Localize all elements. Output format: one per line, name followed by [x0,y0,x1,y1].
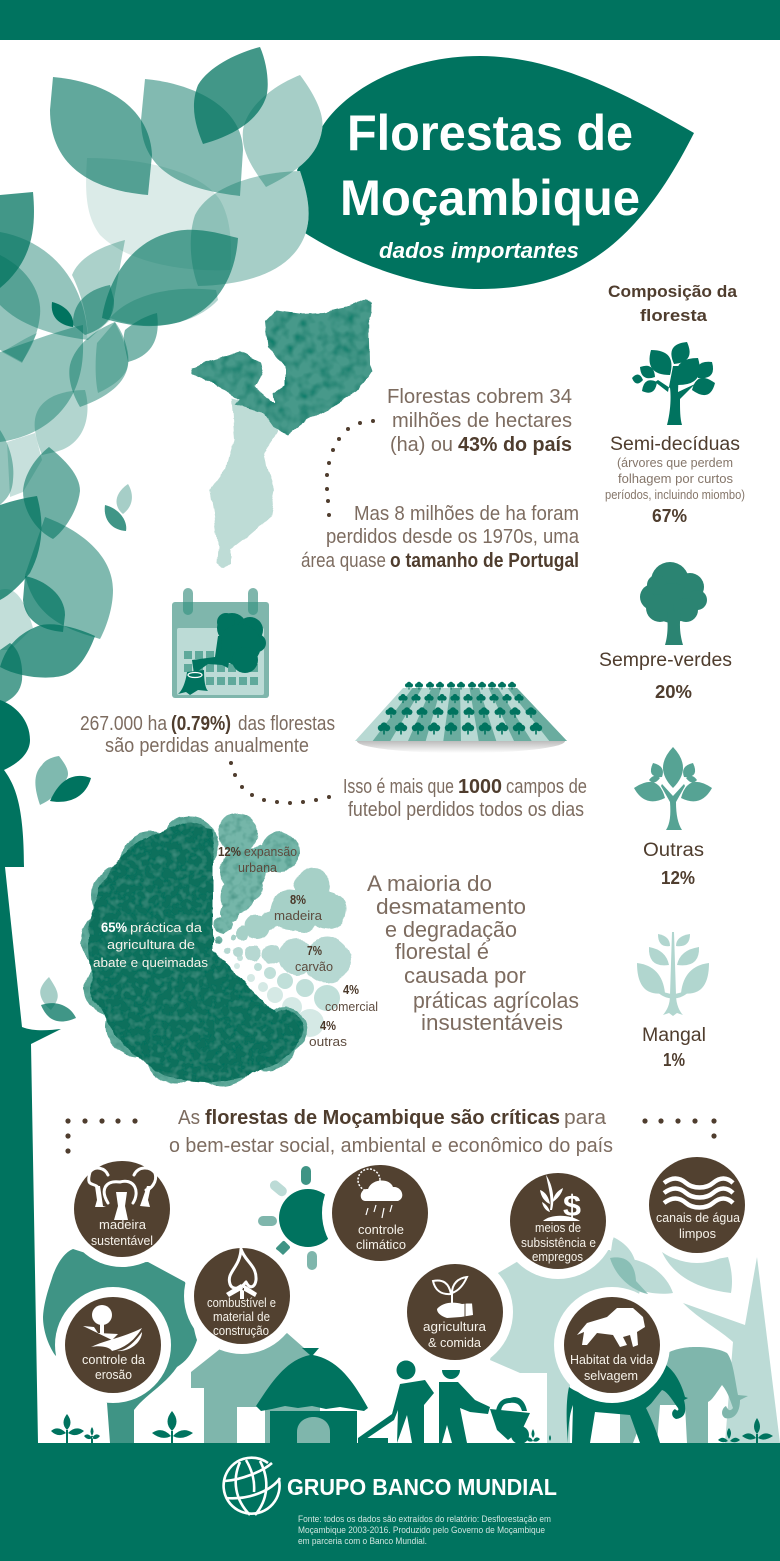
worker with shovel [396,1360,416,1380]
logo: World Bank Group: GRUPO BANCO MUNDIAL [287,1474,557,1500]
benefit: clean waterways [649,1157,745,1253]
source note: Moçambique 2003-2016. Produzido pelo Governo de Moçambique [298,1525,545,1535]
pie label: slash and burn: agricultura de [107,937,195,952]
benefit: fuel and building material: construção [213,1323,269,1338]
scene: hut [256,1348,368,1443]
scene: dark elephant [567,1363,688,1443]
icon: campfire [226,1249,257,1299]
deforestation cause text: práticas agrícolas [413,988,579,1013]
pie label: commercial: 4% [343,982,359,997]
pie label: charcoal [295,943,333,974]
deforestation cause text: insustentáveis [421,1010,563,1035]
benefit: sustainable timber: madeira [99,1217,147,1232]
scene: light elephant [620,1347,748,1443]
pitch [355,688,567,741]
title leaf [297,56,694,289]
icon: plant and dollar: $ [563,1190,581,1223]
benefit: sustainable timber [74,1161,170,1257]
icon: three trees [89,1168,156,1220]
mangrove label: Mangal [642,1025,706,1046]
tree-shaped pie chart [81,813,378,1087]
forest loss text [301,503,580,572]
benefit: agriculture and food: agricultura [423,1319,487,1334]
semi-deciduous label: (árvores que perdem [617,456,733,470]
forest cover text: (ha) ou [390,434,453,456]
tree canopy: upper leaves [50,47,323,326]
composition heading: Composição da [608,282,738,301]
scene: plants [51,1411,773,1443]
icon: evergreen tree [640,562,707,645]
benefit: climate control: climático [356,1237,406,1252]
benefit: climate control [332,1165,428,1261]
benefit: livelihoods and jobs [510,1173,606,1269]
benefit: agriculture and food: & comida [428,1335,482,1350]
other trees label: 12% [661,867,695,888]
dotted accents [65,1118,717,1154]
source note: em parceria com o Banco Mundial. [298,1536,427,1546]
pie label: other: 4% [320,1018,336,1033]
benefit: climate control: controle [358,1222,404,1237]
map: north, forested [192,298,372,435]
felled tree [178,613,266,695]
forest cover text: milhões de hectares [392,410,572,432]
tree canopy: left leaves [0,192,158,705]
football fields text [343,776,587,821]
forest loss text: área quase [301,550,386,572]
map of Mozambique [192,298,372,568]
icon: globe [224,1458,280,1515]
worker with wheelbarrow [442,1370,460,1379]
pie label: urban: urbana [238,860,278,875]
evergreen label: Sempre-verdes [599,650,732,671]
other trees label: Outras [643,840,704,861]
icon: lion [577,1308,645,1347]
scene: sun [258,1166,337,1270]
deforestation cause text: e degradação [385,917,517,942]
floating leaves [35,484,132,1022]
semi-deciduous label: Semi-decíduas [610,434,740,455]
pie label: urban: 12% [218,844,241,859]
section heading: As [178,1107,200,1129]
map: south, lighter [210,398,278,568]
composition heading: floresta [640,306,708,325]
pitch trees [378,682,542,734]
football fields text: 1000 [458,776,502,798]
slice: timber [230,867,346,941]
benefit: sustainable timber: sustentável [91,1233,153,1248]
evergreen label [599,650,732,702]
benefit: erosion control: controle da [82,1352,146,1367]
icon: tree and field [83,1305,142,1351]
scene: workers [358,1360,530,1444]
slice: charcoal [225,937,350,983]
deforestation cause text: A maioria do [367,871,492,896]
football pitch with trees [355,682,567,753]
pie label: slash and burn: 65% [101,920,127,935]
section heading: para [564,1107,607,1129]
section heading: o bem-estar social, ambiental e econômico do país [169,1135,613,1157]
pie label: slash and burn [93,920,209,970]
pie label: urban [218,844,297,875]
semi-deciduous label [605,434,745,526]
benefit: clean waterways: canais de água [656,1210,741,1225]
top banner [0,0,780,40]
pie label: urban: expansão [244,844,297,859]
icon: water waves [664,1178,733,1208]
tree trunk [0,700,61,1443]
section heading [169,1107,613,1157]
pie label: slash and burn: abate e queimadas [93,955,209,970]
title text: dados importantes [379,238,579,263]
icon: calendar with felled tree [172,588,269,698]
forest cover text [387,386,572,456]
other trees label [643,840,704,888]
benefit: fuel and building material: material de [213,1309,270,1324]
pie label: charcoal: carvão [295,959,333,974]
dotted connector: loss [229,761,331,805]
football fields text: Isso é mais que [343,776,454,798]
forest loss text: o tamanho de Portugal [390,550,579,572]
calendar body [172,602,269,698]
benefit: livelihoods and jobs: empregos [532,1249,583,1264]
icon: cloud and rain [358,1169,402,1218]
benefit: fuel and building material [194,1248,290,1344]
slice: commercial [237,955,340,1011]
semi-deciduous label: folhagem por curtos [618,472,733,486]
logo: World Bank Group [224,1458,557,1515]
title text: Florestas de [347,105,633,161]
mangrove label: 1% [663,1049,685,1070]
benefit: erosion control [65,1297,161,1393]
footer band [0,1443,780,1561]
scene: house [191,1333,320,1443]
composition heading [608,282,738,325]
football fields text: futebol perdidos todos os dias [348,799,584,821]
dotted connector: map [325,419,375,517]
pie label: timber [274,892,323,923]
icon: other trees [634,747,712,830]
loss per year text [80,713,335,757]
pitch shadow [357,729,565,753]
scene: pale tree [490,1237,780,1443]
icon: seedling in hand [433,1277,474,1318]
forest cover text: Florestas cobrem 34 [387,386,572,408]
benefit: erosion control: erosão [95,1367,132,1382]
pie label: other: outras [309,1034,348,1049]
title text [340,105,640,263]
slice: urban expansion [214,813,300,944]
pie label: timber: 8% [290,892,306,907]
deforestation cause text: florestal é [395,939,489,964]
benefit: agriculture and food [407,1264,503,1360]
benefit: clean waterways: limpos [679,1226,716,1241]
slice: other [234,963,324,1037]
source note: Fonte: todos os dados são extraídos do relatório: Desflorestação em [298,1514,551,1524]
forest loss text: Mas 8 milhões de ha foram [354,503,579,525]
forest loss text: perdidos desde os 1970s, uma [326,526,580,548]
pie label: other [309,1018,348,1049]
mangrove label [642,1025,706,1070]
deforestation cause text [367,871,579,1035]
football fields text: campos de [506,776,587,798]
deforestation cause text: desmatamento [376,894,526,919]
pie label: charcoal: 7% [307,943,322,958]
loss per year text: (0.79%) [171,713,231,735]
slice: slash and burn [81,816,307,1087]
loss per year text: são perdidas anualmente [105,735,309,757]
scene: left tree [43,1249,197,1443]
semi-deciduous label: períodos, incluindo miombo) [605,488,745,502]
icon: mangrove [637,932,709,1016]
pie label: commercial: comercial [325,999,378,1014]
icon: semi-deciduous tree [632,342,715,425]
title text: Moçambique [340,170,640,226]
benefit: wildlife habitat [564,1297,660,1393]
section heading: florestas de Moçambique são críticas [205,1107,560,1129]
wheelbarrow [490,1409,530,1440]
benefit: livelihoods and jobs: subsistência e [521,1235,596,1250]
benefit: livelihoods and jobs: meios de [535,1220,581,1235]
benefit: wildlife habitat: Habitat da vida [570,1352,654,1367]
forest cover text: 43% do país [458,434,572,456]
pie label: timber: madeira [274,908,323,923]
semi-deciduous label: 67% [652,505,687,526]
white halos behind circles [55,1147,755,1403]
pie label: slash and burn: práctica da [130,920,203,935]
evergreen label: 20% [655,681,692,702]
pie label: commercial [325,982,378,1014]
benefit: wildlife habitat: selvagem [584,1368,638,1383]
benefit: fuel and building material: combustível e [207,1295,276,1310]
loss per year text: 267.000 ha [80,713,168,735]
loss per year text: das florestas [238,713,335,735]
source note [298,1514,551,1546]
calendar grid [184,651,258,685]
calendar rings [183,588,193,615]
deforestation cause text: causada por [404,963,526,988]
